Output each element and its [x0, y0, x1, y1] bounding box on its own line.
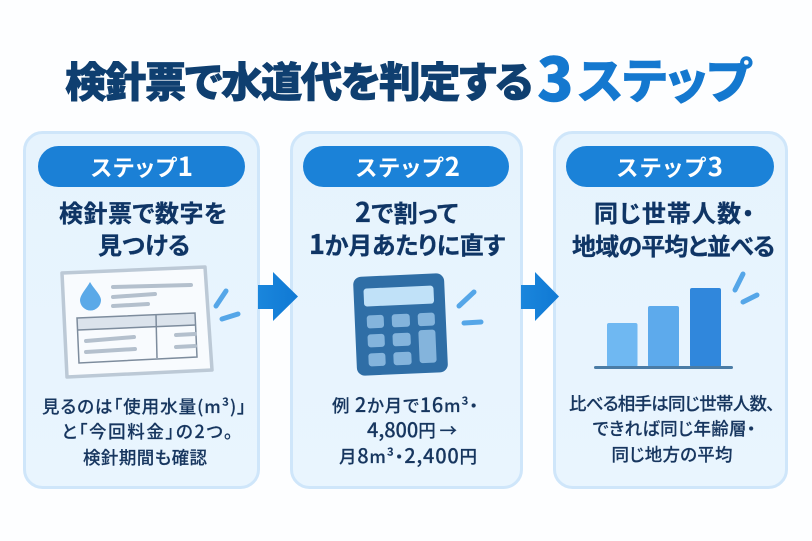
step 2 label: ステップ2	[356, 147, 460, 184]
step 3 text	[569, 391, 775, 467]
step 3 heading	[572, 194, 775, 262]
title: 3	[537, 32, 574, 119]
step 2 text: 月8m³・2,400円	[339, 440, 477, 469]
step 3 label: ステップ3	[617, 147, 723, 184]
step 3 text: 同じ地方の平均	[612, 442, 732, 467]
bar chart	[594, 274, 757, 369]
step 1 heading: 見つける	[98, 226, 190, 261]
icon: meter slip	[62, 267, 238, 377]
title: ステップ	[578, 42, 753, 112]
step 3 heading: 地域の平均と並べる	[572, 227, 775, 262]
panel: step 1	[24, 132, 258, 488]
step 1 text: 検針期間も確認	[83, 445, 208, 470]
step 2 text	[332, 389, 478, 469]
step 1 heading	[59, 194, 227, 261]
step 2 text: 例 2か月で16m³・	[332, 389, 478, 418]
step 1 text: と「今回料金」の2つ。	[62, 418, 232, 444]
step 1 label	[38, 146, 245, 187]
title	[65, 32, 753, 119]
step 3 label	[566, 146, 774, 187]
step 2 heading	[309, 191, 505, 262]
step 3 text: できれば同じ年齢層・	[592, 416, 756, 441]
step 2 label	[303, 146, 509, 187]
title: 検針票で水道代を判定する	[65, 49, 533, 109]
step 3 heading: 同じ世帯人数・	[594, 194, 754, 229]
step 1 heading: 検針票で数字を	[59, 194, 227, 229]
step 3 text: 比べる相手は同じ世帯人数、	[569, 391, 775, 416]
icon: calculator	[353, 273, 481, 376]
panel: step 3	[554, 132, 786, 488]
step 2 heading: 1か月あたりに直す	[309, 223, 505, 262]
step 1 label: ステップ1	[91, 147, 193, 184]
step 1 text: 見るのは「使用水量(m³)」	[42, 394, 246, 419]
arrow: step 2 to step 3	[521, 272, 559, 321]
panel: step 2	[292, 132, 522, 488]
step 2 text: 4,800円 →	[367, 414, 457, 443]
icon: water drop	[80, 282, 101, 310]
step 2 heading: 2で割って	[355, 191, 458, 230]
step 1 text	[42, 394, 246, 470]
arrow: step 1 to step 2	[258, 272, 298, 321]
